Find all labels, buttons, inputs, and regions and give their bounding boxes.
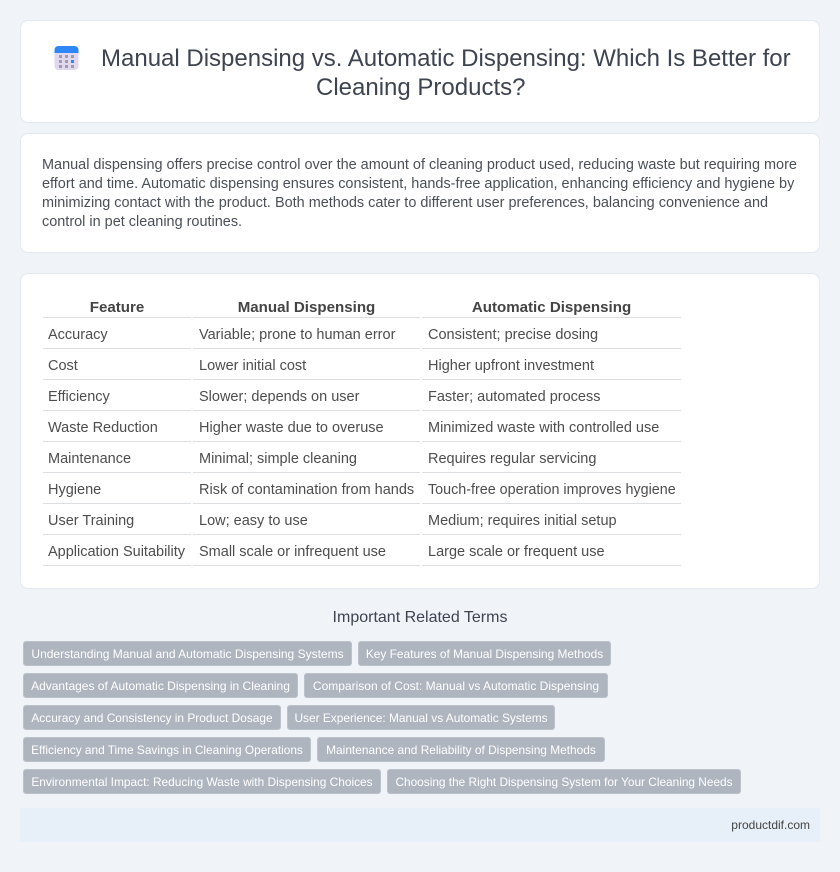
footer source: productdif.com — [731, 818, 810, 832]
text: Consistent; precise dosing — [428, 327, 598, 343]
text: Requires regular servicing — [428, 451, 596, 467]
row: cost: Cost — [48, 358, 78, 374]
text: Large scale or frequent use — [428, 544, 605, 560]
row: maintenance: Maintenance — [48, 451, 131, 467]
title: Manual Dispensing vs. Automatic Dispensing: Which Is Better for — [101, 45, 791, 72]
intro text: Manual dispensing offers precise control over the amount of cleaning product used, reducing waste but requiring more — [42, 157, 797, 173]
related terms heading: Important Related Terms — [333, 609, 507, 626]
table header: automatic dispensing: Automatic Dispensing — [472, 299, 631, 316]
title: Cleaning Products? — [316, 74, 525, 101]
related term chips: Key Features of Manual Dispensing Methods — [366, 647, 603, 661]
text: Touch-free operation improves hygiene — [428, 482, 676, 498]
related term chips: Environmental Impact: Reducing Waste with Dispensing Choices — [31, 775, 373, 789]
related term chips — [23, 641, 741, 794]
row: accuracy: Accuracy — [48, 327, 108, 343]
row: waste reduction: Waste Reduction — [48, 420, 158, 436]
text: Minimized waste with controlled use — [428, 420, 659, 436]
text: Variable; prone to human error — [199, 327, 395, 343]
panel: comparison table — [20, 273, 820, 589]
intro text: effort and time. Automatic dispensing ensures consistent, hands-free application, enhancing efficiency and hygiene by — [42, 176, 794, 192]
text: Lower initial cost — [199, 358, 306, 374]
intro text: control in pet cleaning routines. — [42, 214, 242, 230]
title — [101, 45, 791, 101]
text: Higher upfront investment — [428, 358, 594, 374]
row: user training: User Training — [48, 513, 134, 529]
text: Medium; requires initial setup — [428, 513, 617, 529]
related term chips: Comparison of Cost: Manual vs Automatic Dispensing — [313, 679, 599, 693]
text: Risk of contamination from hands — [199, 482, 414, 498]
text: Faster; automated process — [428, 389, 600, 405]
related term chips: Understanding Manual and Automatic Dispensing Systems — [31, 647, 344, 661]
row: efficiency: Efficiency — [48, 389, 110, 405]
text: Low; easy to use — [199, 513, 308, 529]
related term chips: Efficiency and Time Savings in Cleaning Operations — [31, 743, 303, 757]
header panel — [20, 20, 820, 123]
text: Minimal; simple cleaning — [199, 451, 357, 467]
text: Small scale or infrequent use — [199, 544, 386, 560]
related term chips: Accuracy and Consistency in Product Dosage — [31, 711, 273, 725]
related term chips: Maintenance and Reliability of Dispensing Methods — [326, 743, 596, 757]
text: Higher waste due to overuse — [199, 420, 384, 436]
table header: feature: Feature — [90, 299, 144, 316]
panel: introduction — [20, 133, 820, 253]
row: hygiene: Hygiene — [48, 482, 101, 498]
row: application suitability: Application Suitability — [48, 544, 185, 560]
text: Slower; depends on user — [199, 389, 359, 405]
related term chips: User Experience: Manual vs Automatic Systems — [294, 711, 548, 725]
icon: calendar grid — [54, 46, 78, 70]
intro text — [42, 157, 797, 230]
intro text: minimizing contact with the product. Both methods cater to different user preferences, balancing convenience and — [42, 195, 768, 211]
related term chips: Choosing the Right Dispensing System for Your Cleaning Needs — [395, 775, 733, 789]
table header: manual dispensing: Manual Dispensing — [238, 299, 375, 316]
footer bar — [20, 808, 820, 842]
related term chips: Advantages of Automatic Dispensing in Cleaning — [31, 679, 290, 693]
